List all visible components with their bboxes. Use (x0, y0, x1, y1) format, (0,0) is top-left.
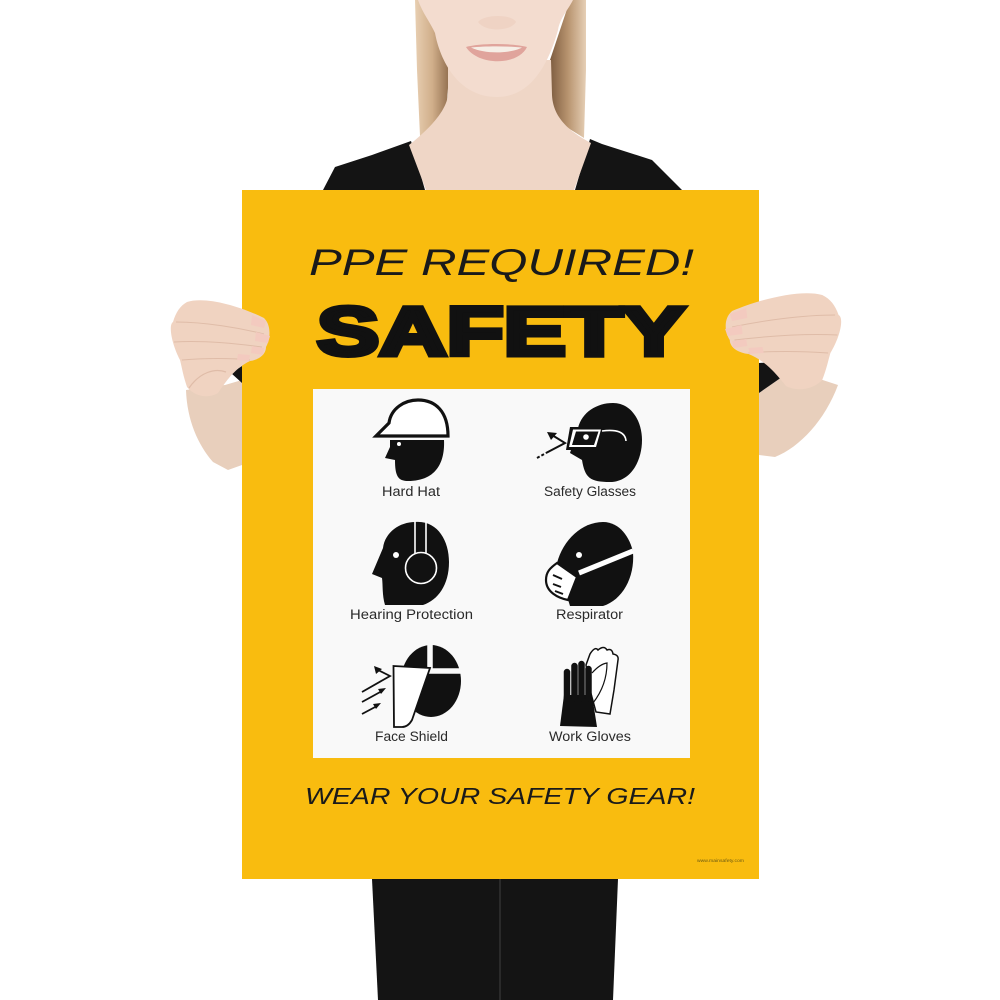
shirt (323, 139, 682, 190)
face (418, 0, 573, 97)
heading: Safety: SAFETY (317, 293, 685, 370)
person: model behind poster (186, 0, 838, 1000)
nose (478, 16, 516, 30)
right hand gripping poster (725, 293, 841, 389)
website credit: www.mainsafety.com (697, 858, 744, 863)
footer slogan: WEAR YOUR SAFETY GEAR! (305, 783, 696, 809)
icon: safety glasses (537, 403, 642, 482)
right sleeve (759, 362, 792, 393)
icon: hearing protection (372, 521, 449, 605)
heading: PPE Required: PPE REQUIRED! (309, 242, 694, 283)
trousers (372, 879, 618, 1000)
label: Work Gloves: Work Gloves (549, 729, 631, 744)
left arm (186, 380, 242, 470)
right arm (759, 370, 838, 457)
label: Hearing Protection: Hearing Protection (350, 607, 473, 622)
icon: work gloves (560, 648, 618, 727)
icon: hard hat (376, 400, 448, 481)
label: Respirator: Respirator (556, 607, 624, 622)
neck and chest (409, 60, 591, 190)
label: Safety Glasses: Safety Glasses (544, 484, 636, 499)
hair (415, 0, 586, 138)
icon: respirator (546, 522, 633, 606)
left hand gripping poster (171, 300, 270, 396)
poster (242, 190, 759, 879)
mouth (466, 44, 527, 61)
left sleeve (231, 366, 242, 383)
icon: face shield (362, 644, 462, 727)
label: Face Shield: Face Shield (375, 729, 448, 744)
panel: PPE icons (313, 389, 690, 758)
label: Hard Hat: Hard Hat (382, 484, 440, 499)
